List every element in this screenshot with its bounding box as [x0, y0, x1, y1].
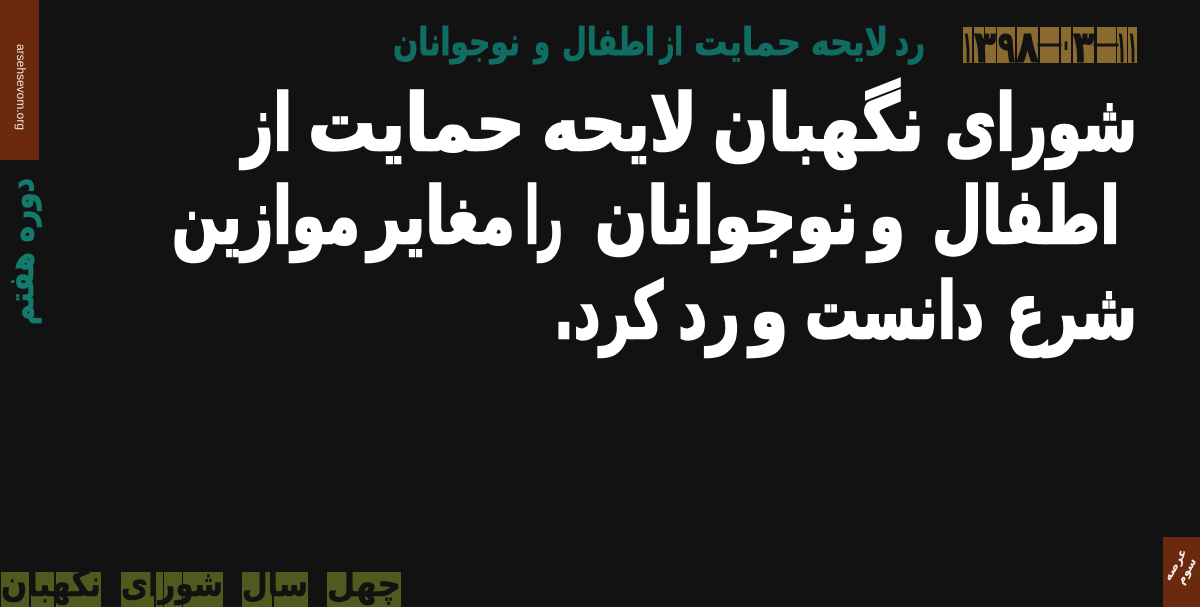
- date strip: [963, 18, 1137, 73]
- vertical label: term: دوره هفتم: [2, 178, 42, 325]
- main headline: از: [239, 79, 292, 169]
- subtitle: از: [659, 20, 683, 64]
- main headline: شرع: [1006, 267, 1137, 357]
- footer strip: forty years of the Guardian Council: نگهبان: [1, 563, 101, 605]
- main headline: را: [525, 172, 563, 262]
- main headline: حمایت: [308, 79, 525, 169]
- main headline: و: [866, 172, 905, 262]
- date strip: ۳: [1073, 22, 1094, 73]
- date strip: ۰: [1062, 18, 1070, 69]
- main headline: کرد.: [554, 267, 663, 357]
- footer strip: forty years of the Guardian Council: سال: [242, 564, 308, 605]
- main headline: نگهبان: [713, 79, 924, 169]
- main headline: موازین: [172, 172, 360, 262]
- date strip: ۱: [1117, 22, 1126, 73]
- subtitle: نوجوانان: [393, 20, 520, 64]
- main headline: مغایر: [365, 172, 515, 262]
- date strip: ۸: [1016, 22, 1039, 73]
- main headline: و: [747, 267, 788, 357]
- main headline: رد: [678, 267, 740, 357]
- subtitle: اطفال: [562, 20, 655, 64]
- main headline: اطفال: [932, 172, 1120, 262]
- logo tab: [1160, 537, 1200, 607]
- subtitle: لایحه: [811, 20, 888, 64]
- logo tab: سوم: [1173, 555, 1200, 587]
- subtitle: و: [533, 20, 550, 65]
- main headline: دانست: [805, 267, 984, 357]
- subtitle: رد: [895, 20, 925, 64]
- main headline: [172, 79, 1137, 357]
- main headline: نوجوانان: [595, 172, 858, 262]
- footer strip: forty years of the Guardian Council: چهل: [327, 564, 401, 605]
- date strip: ۱: [963, 22, 972, 73]
- subtitle: [393, 20, 925, 65]
- side tab: website: arsehsevom.org: [14, 44, 26, 130]
- date strip: ۹: [998, 22, 1015, 73]
- subtitle: حمایت: [694, 20, 801, 64]
- footer strip: forty years of the Guardian Council: شورای: [121, 564, 223, 605]
- text: ۱: [1128, 22, 1137, 73]
- footer strip: forty years of the Guardian Council: [1, 563, 401, 607]
- logo tab: عرصه: [1160, 546, 1190, 583]
- side tab: website: [0, 0, 39, 160]
- date strip: ۳: [974, 22, 996, 73]
- main headline: لایحه: [542, 79, 697, 169]
